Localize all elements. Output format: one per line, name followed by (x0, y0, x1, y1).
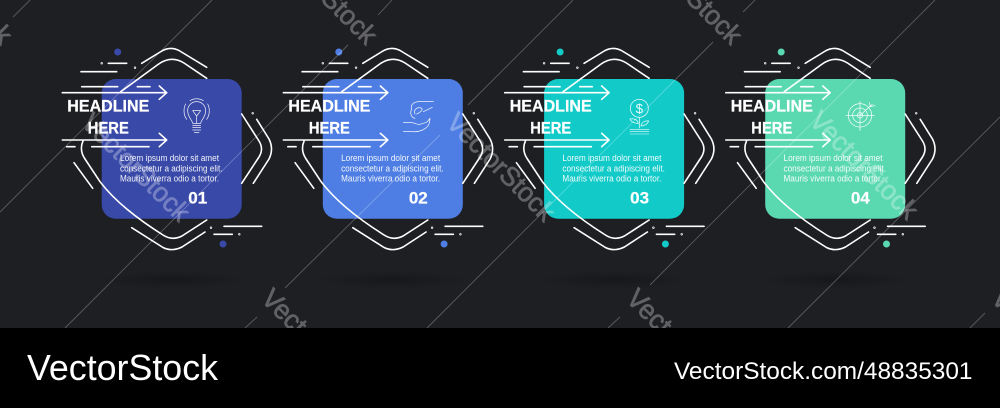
body text 04 (784, 153, 886, 184)
headline 03 (510, 97, 592, 137)
number 02: 02 (409, 188, 428, 207)
arrows 03 (505, 86, 609, 147)
card 02 (323, 79, 463, 219)
body text 02: Mauris viverra odio a tortor. (341, 174, 440, 184)
number 03: 03 (630, 188, 649, 207)
headline 03: HEADLINE (510, 97, 592, 116)
headline 01: HERE (88, 118, 129, 137)
body text 01: Lorem ipsum dolor sit amet (120, 153, 219, 163)
body text 01 (120, 153, 222, 184)
headline 03: HERE (530, 118, 571, 137)
body text 04: consectetur a adipiscing elit. (784, 163, 886, 173)
diamond frame 03 (516, 48, 714, 250)
headline 02: HERE (309, 118, 350, 137)
diamond frame 02 (295, 48, 493, 250)
icon: target with arrow (846, 101, 875, 131)
body text 02 (341, 153, 444, 184)
accent dots 03 (557, 48, 669, 248)
body text 01: consectetur a adipiscing elit. (120, 163, 222, 173)
speed lines and dots 03 (509, 63, 704, 235)
watermark text: VectorStock (441, 107, 561, 228)
body text 04: Lorem ipsum dolor sit amet (784, 153, 883, 163)
body text 04: Mauris viverra odio a tortor. (784, 174, 882, 184)
body text 03 (562, 153, 665, 184)
watermark text: VectorStock (76, 107, 196, 228)
body text 03: consectetur a adipiscing elit. (562, 163, 665, 173)
icon: money plant: $ (636, 101, 644, 116)
diamond frame 04 (738, 48, 935, 250)
arrows 01 (62, 86, 167, 147)
footer url: VectorStock.com/48835301 (674, 358, 972, 385)
footer band (0, 328, 1000, 408)
body text 03: Mauris viverra odio a tortor. (562, 174, 661, 184)
panel: step 04 (726, 48, 935, 250)
icon: light bulb (184, 99, 209, 132)
arrows 02 (283, 86, 388, 147)
headline 04 (731, 97, 813, 137)
accent dots 02 (335, 48, 448, 248)
speed lines and dots 04 (730, 63, 925, 235)
headline 02: HEADLINE (288, 97, 370, 116)
arrows 04 (726, 86, 830, 147)
watermark text: VectorStock (256, 283, 376, 404)
icon: hand holding coin (403, 102, 433, 132)
speed lines and dots 02 (288, 63, 483, 235)
watermark text: VectorStock (804, 105, 924, 226)
body text 02: Lorem ipsum dolor sit amet (341, 153, 441, 163)
footer logo: VectorStock (27, 347, 219, 388)
headline 04: HERE (751, 118, 792, 137)
icon: money plant (630, 99, 649, 134)
number 01: 01 (188, 188, 207, 207)
body text 01: Mauris viverra odio a tortor. (120, 174, 219, 184)
body text 03: Lorem ipsum dolor sit amet (562, 153, 662, 163)
panel: step 02 (283, 48, 493, 250)
panel: step 01 (62, 48, 271, 250)
card 03 (544, 79, 684, 219)
body text 02: consectetur a adipiscing elit. (341, 163, 444, 173)
headline 01 (67, 97, 149, 137)
watermark text: VectorStock (621, 283, 741, 404)
card 01 (102, 79, 242, 219)
headline 01: HEADLINE (67, 97, 149, 116)
accent dots 04 (778, 48, 890, 248)
accent dots 01 (114, 48, 226, 248)
panel: step 03 (505, 48, 714, 250)
card 04 (765, 79, 905, 219)
number 04: 04 (851, 188, 870, 207)
floor shadows (97, 271, 910, 289)
headline 04: HEADLINE (731, 97, 813, 116)
diamond frame 01 (74, 48, 272, 250)
speed lines and dots 01 (67, 63, 262, 235)
headline 02 (288, 97, 370, 137)
